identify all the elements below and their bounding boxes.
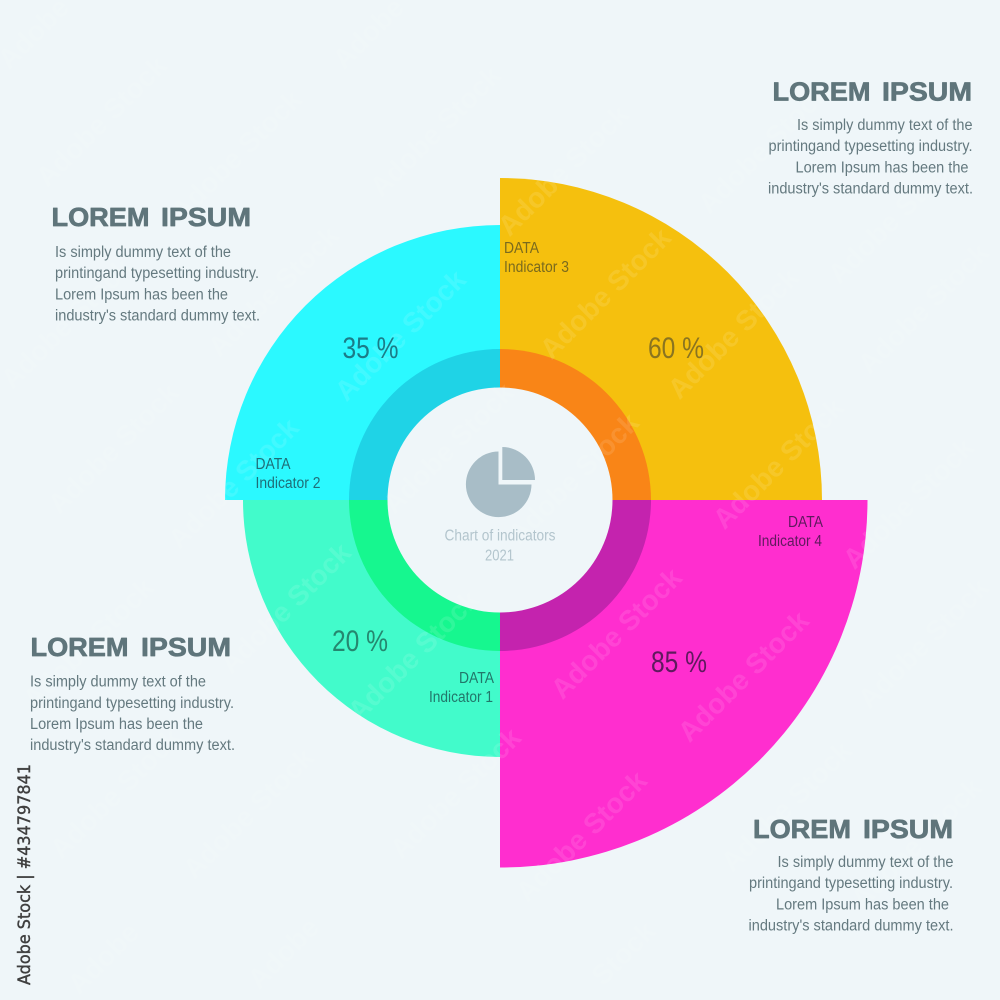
data label: indicator 1 [429,670,495,706]
body text: printingand typesetting industry. [768,138,972,155]
body text: Lorem Ipsum has been the [55,286,228,304]
body text: industry's standard dummy text. [748,918,954,934]
watermark pattern: Adobe Stock [162,412,305,555]
watermark pattern: Adobe Stock [44,722,187,865]
body text: industry's standard dummy text. [30,737,235,754]
body text: Lorem Ipsum has been the [30,716,203,733]
watermark pattern: Adobe [62,917,145,1000]
heading: IPSUM [863,814,953,844]
data label: indicator 3: Indicator 3 [504,259,569,276]
percentage: 35: 35 % [342,332,398,365]
segment: indicator 4 magenta [500,500,868,868]
body text: Lorem Ipsum has been the [796,160,968,176]
data label: indicator 2: DATA [256,456,291,473]
body text: printingand typesetting industry. [749,875,953,892]
data label: indicator 4: Indicator 4 [758,533,822,550]
data label: indicator 3: DATA [504,240,540,257]
data label: indicator 4 [758,514,824,550]
text block: bottom right [748,814,954,934]
watermark pattern: Adobe Stock [492,99,635,242]
heading: LOREM [772,76,870,106]
center caption: Chart of indicators [444,528,556,544]
watermark pattern: Adobe Stock [30,50,173,193]
watermark pattern: Adobe Stock [662,262,805,405]
center hole [388,388,612,612]
heading: IPSUM [882,76,972,106]
center caption: 2021 [485,548,514,564]
body text: printingand typesetting industry. [30,695,234,712]
body text [30,674,235,754]
heading: LOREM [52,202,150,232]
segment: indicator 2 cyan [225,225,500,500]
inner ring: purple [500,500,651,651]
watermark pattern: Adobe Stock [384,722,527,865]
heading: LOREM [753,814,851,844]
percentage: 20: 20 % [332,625,388,658]
data label: indicator 3 [504,240,569,276]
watermark pattern: Adobe Stock [692,77,835,220]
stock id stamp: Adobe Stock | #434797841 [15,764,35,985]
watermark pattern: Adobe Stock [534,222,677,365]
body text: industry's standard dummy text. [55,308,260,324]
body text: Is simply dummy text of the [797,117,972,134]
data label: indicator 1: DATA [459,670,495,687]
watermark pattern: Adobe Stock [510,765,653,908]
watermark pattern: Adobe Stock [214,537,357,680]
body text: printingand typesetting industry. [55,265,259,282]
body text: Is simply dummy text of the [778,854,954,871]
percentage: 85: 85 % [651,646,707,679]
icon: pie chart [466,447,535,517]
center caption [444,528,556,564]
inner ring: blue [349,349,500,500]
watermark pattern: Adobe Stock [852,572,995,715]
text block: bottom left [30,632,235,754]
watermark pattern: Adobe Stock [42,377,185,520]
heading: LOREM [30,632,128,662]
watermark pattern: Adobe Stock [342,584,485,727]
watermark pattern: Adobe Stock [17,572,160,715]
watermark pattern: Adobe Stock [707,392,850,535]
watermark pattern: Adobe Stock [852,237,995,380]
segment: indicator 1 green [243,500,500,757]
percentage: 60: 60 % [648,332,704,365]
body text: industry's standard dummy text. [768,180,973,198]
body text: Is simply dummy text of the [55,244,231,261]
text block: top left [52,202,260,324]
watermark pattern: Adobe Stock [822,147,965,290]
watermark pattern: Adobe Stock [377,377,520,520]
watermark pattern: Adobe Stock [545,562,688,705]
heading: IPSUM [141,632,231,662]
watermark pattern: Adobe Stock [177,742,320,885]
radial chart [225,178,868,868]
data label: indicator 2 [256,456,320,492]
body text [55,244,260,324]
data label: indicator 1: Indicator 1 [429,689,493,706]
watermark pattern: Adobe Stock [715,735,858,878]
body text [748,854,954,934]
watermark pattern: Adobe Stock [502,407,645,550]
watermark pattern: Stock [585,915,662,991]
body text [768,117,973,198]
watermark pattern: Adobe Stock [364,60,507,203]
watermark pattern: Adobe Stock [329,264,472,407]
body text: Lorem Ipsum has been the [776,896,949,914]
watermark pattern: Adobe Stock [672,605,815,748]
watermark pattern: Adobe Stock [165,84,308,227]
body text: Is simply dummy text of the [30,674,206,690]
watermark pattern: Adobe Stock [837,432,980,575]
data label: indicator 2: Indicator 2 [256,475,320,492]
heading: IPSUM [161,202,251,232]
data label: indicator 4: DATA [788,514,824,531]
inner ring: orange [500,349,651,500]
watermark pattern: Adobe Stock [202,220,345,363]
text block: top right [768,76,973,198]
watermark pattern: Adobe Stock [845,772,988,915]
segment: indicator 3 yellow [500,178,822,500]
inner ring: green [349,500,500,651]
watermark pattern: Adobe [242,912,325,995]
